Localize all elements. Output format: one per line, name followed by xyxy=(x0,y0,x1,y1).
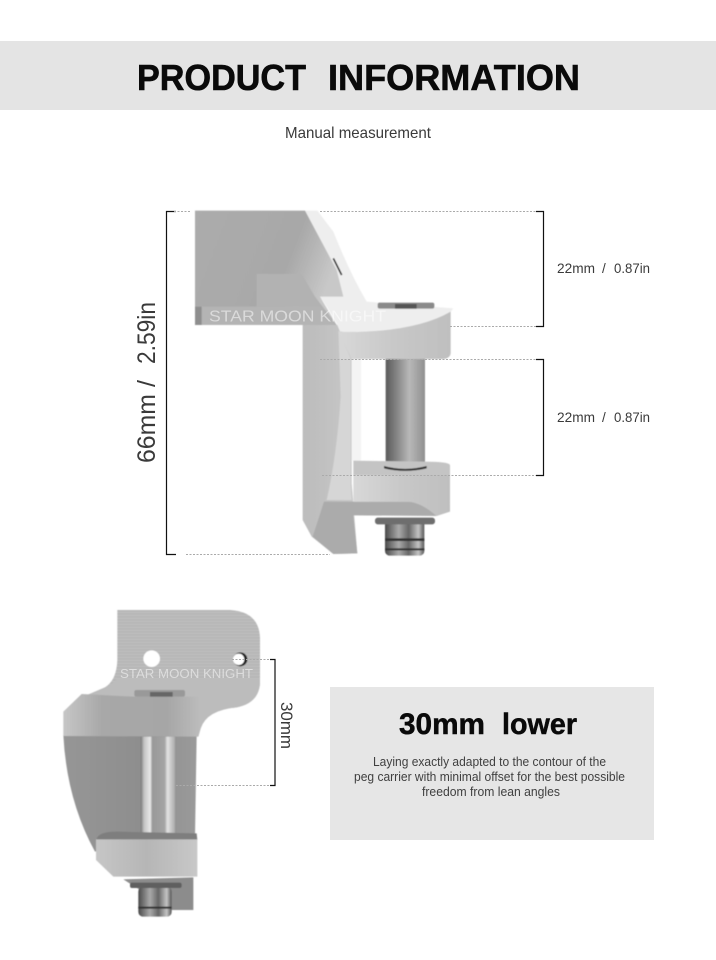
panel heading xyxy=(399,708,577,741)
body xyxy=(63,735,197,852)
watermark: rear view: STAR MOON KNIGHT xyxy=(120,666,253,681)
upper arm xyxy=(338,312,451,359)
pin xyxy=(141,737,175,838)
label xyxy=(557,261,650,276)
label: 30mm xyxy=(277,702,296,749)
panel heading: 30mm xyxy=(399,708,485,741)
dimension: 30mm xyxy=(176,660,296,786)
panel body text: peg carrier with minimal offset for the best possible xyxy=(354,769,625,784)
height label: / xyxy=(133,380,161,387)
product photo: side view xyxy=(195,211,453,556)
bolt stack xyxy=(385,518,424,556)
label: 22mm xyxy=(557,261,595,276)
gap highlight xyxy=(352,359,361,461)
lower arm top xyxy=(353,461,450,475)
rear bracket foot xyxy=(123,877,193,910)
title xyxy=(137,57,580,98)
upper arm xyxy=(63,694,202,737)
watermark: side view: STAR MOON KNIGHT xyxy=(209,308,386,326)
height label: 66mm xyxy=(133,394,161,463)
title: PRODUCT xyxy=(137,57,306,98)
dimension: overall height xyxy=(133,212,330,554)
subtitle: Manual measurement xyxy=(285,125,432,142)
title: INFORMATION xyxy=(328,57,580,98)
pin xyxy=(386,359,425,468)
panel heading: lower xyxy=(502,708,577,741)
label xyxy=(557,410,650,425)
panel body text: Laying exactly adapted to the contour of the xyxy=(373,754,606,769)
label: 22mm xyxy=(557,410,595,425)
label: 0.87in xyxy=(614,261,650,276)
height label xyxy=(133,302,161,463)
label: 0.87in xyxy=(614,410,650,425)
bolt stack xyxy=(138,887,172,917)
product photo: rear view xyxy=(63,610,260,917)
lower arm xyxy=(353,475,450,516)
label: / xyxy=(602,410,606,425)
panel: 30mm lower xyxy=(330,687,654,840)
light edge xyxy=(305,211,453,332)
lower arm xyxy=(96,839,197,877)
column xyxy=(303,325,357,554)
dimension: lower 22mm xyxy=(320,360,650,476)
lower arm top xyxy=(97,832,197,840)
top nut xyxy=(378,303,434,309)
top nut xyxy=(134,690,185,697)
holes xyxy=(143,650,160,667)
header band xyxy=(0,41,716,110)
plate xyxy=(83,610,260,737)
dimension: upper 22mm xyxy=(320,212,650,326)
top block xyxy=(195,211,343,325)
height label: 2.59in xyxy=(133,302,161,364)
label: / xyxy=(602,261,606,276)
panel body text xyxy=(354,754,625,799)
panel body text: freedom from lean angles xyxy=(422,784,560,799)
